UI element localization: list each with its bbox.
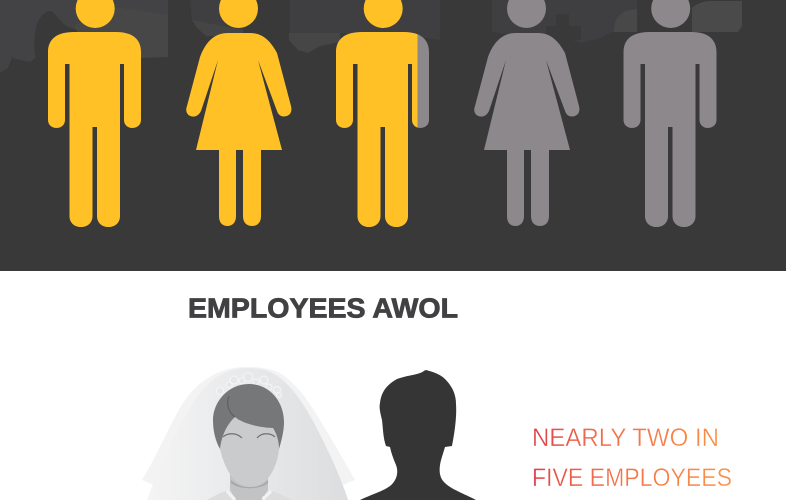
bride veil [142,367,355,500]
icon: groom silhouette [360,370,476,500]
icon: person 4 woman grey [474,0,579,226]
text block: nearly two in five employees: NEARLY TWO IN [532,425,719,452]
bride flower crown [216,372,282,398]
icon: person 1 man yellow [48,0,141,227]
bride neck [230,470,268,500]
bride hair parting [228,396,235,417]
bride shoulders [207,490,292,500]
icon: person 3 man part yellow [336,0,429,227]
bride hair [213,384,284,455]
bride chin shadow [231,480,268,488]
icon: person 5 man grey [624,0,716,227]
icon: bride [142,367,355,500]
heading: employees awol: EMPLOYEES AWOL [188,292,458,324]
bride pearl necklace [228,492,270,500]
bride face [220,417,279,487]
icon: person 2 woman yellow [186,0,291,226]
text block: nearly two in five employees [532,425,732,492]
graveyard silhouette [0,0,742,80]
bride eyebrows [223,434,275,438]
panel: dark graveyard background [0,0,786,271]
text block: nearly two in five employees: FIVE EMPLOYEES [532,465,732,492]
